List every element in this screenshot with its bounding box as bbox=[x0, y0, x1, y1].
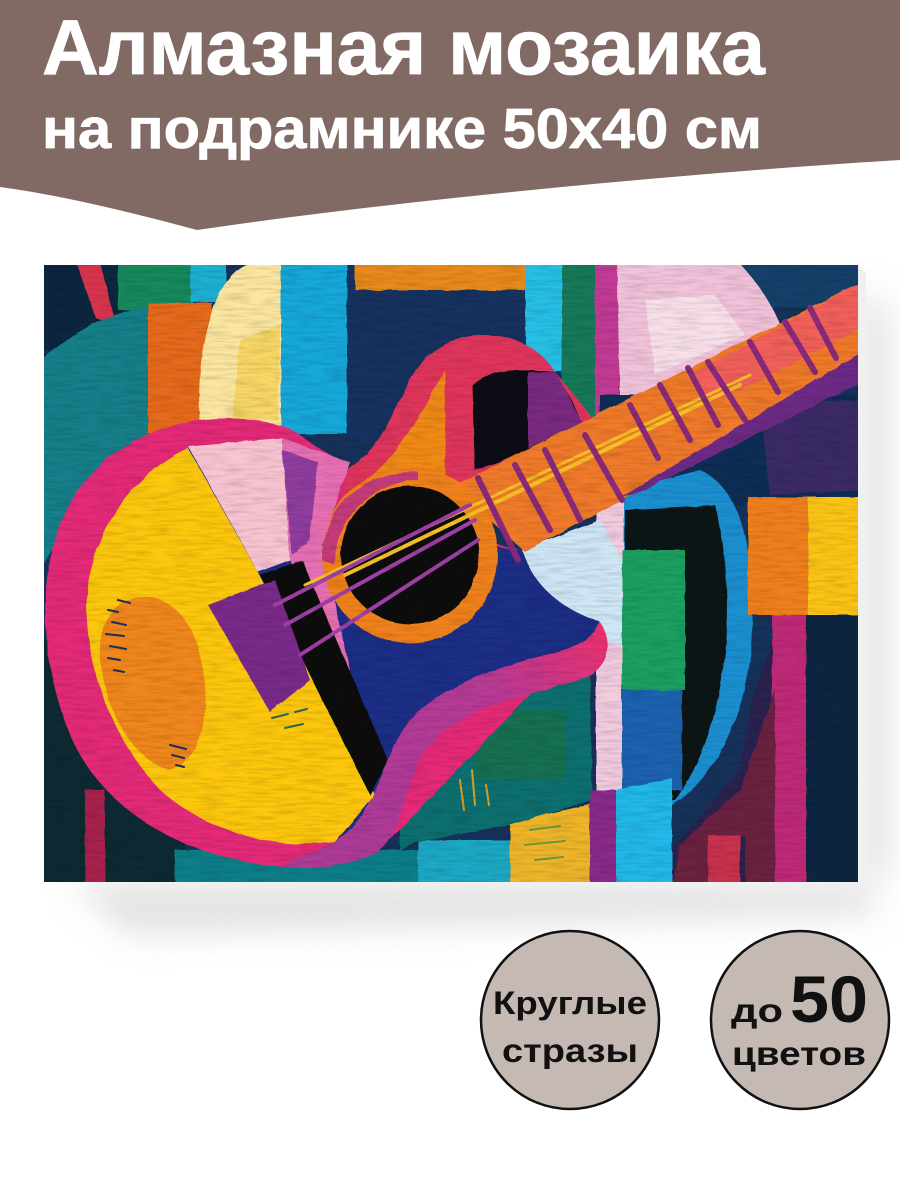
guitar lower wave bbox=[280, 622, 608, 868]
canvas shadow bbox=[70, 265, 890, 935]
badge: round rhinestones: стразы bbox=[502, 1032, 638, 1069]
guitar body inner panels bbox=[87, 438, 388, 844]
painting: abstract guitar bbox=[40, 260, 865, 890]
badge: up to 50 colours: цветов bbox=[732, 1035, 866, 1072]
guitar upper bout bbox=[344, 334, 592, 523]
header banner bbox=[0, 0, 900, 230]
strings and frets bbox=[275, 308, 836, 655]
badge: round rhinestones: Круглые bbox=[493, 985, 647, 1021]
badge: round rhinestones bbox=[481, 931, 659, 1109]
title: Алмазная мозаика bbox=[42, 3, 766, 91]
paint specks bbox=[106, 600, 565, 860]
neck bbox=[445, 282, 862, 552]
subtitle: на подрамнике 50х40 см bbox=[42, 97, 762, 161]
painting background blocks bbox=[40, 260, 865, 890]
badge: up to 50 colours: до bbox=[731, 992, 783, 1029]
badge: up to 50 colours: 50 bbox=[790, 962, 868, 1036]
badge: up to 50 colours bbox=[711, 931, 889, 1109]
soundhole bbox=[322, 467, 498, 643]
brush texture bbox=[44, 265, 858, 882]
title bbox=[42, 3, 766, 161]
guitar body outer ring bbox=[45, 418, 600, 868]
guitar body interior bbox=[188, 440, 600, 842]
